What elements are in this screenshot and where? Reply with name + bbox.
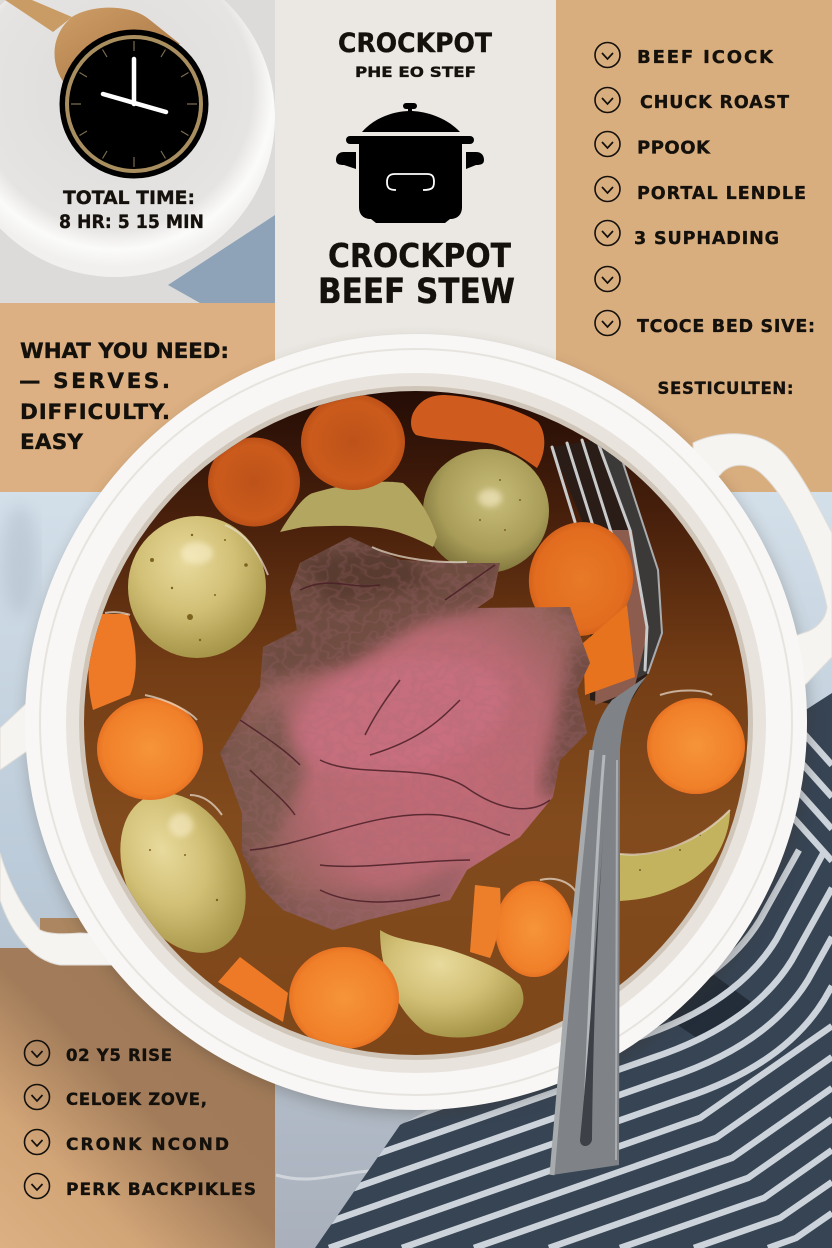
carrots xyxy=(89,394,745,1049)
icon: crockpot xyxy=(336,103,484,223)
item: perk backpikles: PERK BACKPIKLES xyxy=(66,1180,256,1200)
fork handle xyxy=(552,676,647,1175)
meat cracks xyxy=(240,565,550,902)
item: celoek zove: CELOEK ZOVE, xyxy=(66,1090,207,1109)
pot shadow xyxy=(27,342,809,1114)
item: ppook xyxy=(595,132,711,158)
item: perk backpikles xyxy=(24,1174,256,1200)
icon: wooden spoon xyxy=(5,0,180,84)
icon: clock xyxy=(60,30,208,178)
item: tcoce bed sive xyxy=(595,310,815,337)
panel: total time xyxy=(0,0,275,303)
panel: what you need xyxy=(0,303,275,492)
left handles xyxy=(0,700,115,965)
marble veining xyxy=(2,505,400,1179)
potato specks xyxy=(149,479,701,901)
panel: what you need: WHAT YOU NEED: xyxy=(20,339,229,364)
main title: BEEF STEW xyxy=(318,272,515,312)
striped towel xyxy=(300,690,832,1248)
subtitle: PHE EO STEF xyxy=(355,65,476,81)
panel: what you need: — SERVES. xyxy=(19,369,170,394)
broth fat sheen xyxy=(372,547,467,562)
fat highlights xyxy=(105,525,730,892)
marble background xyxy=(0,490,832,1248)
panel: ingredients checklist xyxy=(556,0,832,492)
main title: CROCKPOT xyxy=(328,236,511,275)
item: beef icock xyxy=(595,42,774,68)
crockpot bowl xyxy=(0,334,832,1175)
total time text xyxy=(60,190,203,228)
item: portal lendle xyxy=(595,176,806,204)
item: ppook: PPOOK xyxy=(637,138,711,158)
item: chuck roast xyxy=(595,88,789,113)
sesticulten label: SESTICULTEN: xyxy=(658,379,794,398)
small title: CROCKPOT xyxy=(338,28,493,59)
item: 3 suphading: 3 SUPHADING xyxy=(634,229,779,249)
upper crust xyxy=(260,542,500,689)
total time text: 8 HR: 5 15 MIN xyxy=(59,211,204,233)
item: 3 suphading xyxy=(595,220,779,249)
meat vein texture xyxy=(221,538,588,912)
beef roast xyxy=(210,530,600,940)
panel: bottom checklist xyxy=(0,918,275,1248)
white plate xyxy=(0,0,275,277)
main title xyxy=(318,236,515,312)
right handle xyxy=(693,434,832,700)
fork head xyxy=(552,440,662,707)
item: 02 y5 rise xyxy=(24,1040,172,1066)
item: cronk ncond xyxy=(24,1130,229,1155)
towel fold shadow xyxy=(668,975,751,1037)
item: 02 y5 rise: 02 Y5 RISE xyxy=(66,1046,172,1065)
broth xyxy=(84,391,748,1055)
item: portal lendle: PORTAL LENDLE xyxy=(637,184,806,204)
pink center xyxy=(288,662,502,766)
item: celoek zove xyxy=(24,1084,207,1110)
total time text: TOTAL TIME: xyxy=(63,187,195,209)
item: empty check xyxy=(595,266,620,292)
potatoes xyxy=(96,449,730,1037)
panel: what you need: EASY xyxy=(20,430,83,455)
panel: what you need: DIFFICULTY. xyxy=(20,400,170,425)
potato highlights xyxy=(169,489,502,837)
icon: blue cloth xyxy=(168,215,275,303)
item: chuck roast: CHUCK ROAST xyxy=(640,93,789,113)
item: cronk ncond: CRONK NCOND xyxy=(66,1135,229,1155)
item: beef icock: BEEF ICOCK xyxy=(637,47,774,68)
item: tcoce bed sive: TCOCE BED SIVE: xyxy=(637,317,815,337)
panel: title column xyxy=(275,0,556,360)
pot rim xyxy=(25,334,807,1110)
